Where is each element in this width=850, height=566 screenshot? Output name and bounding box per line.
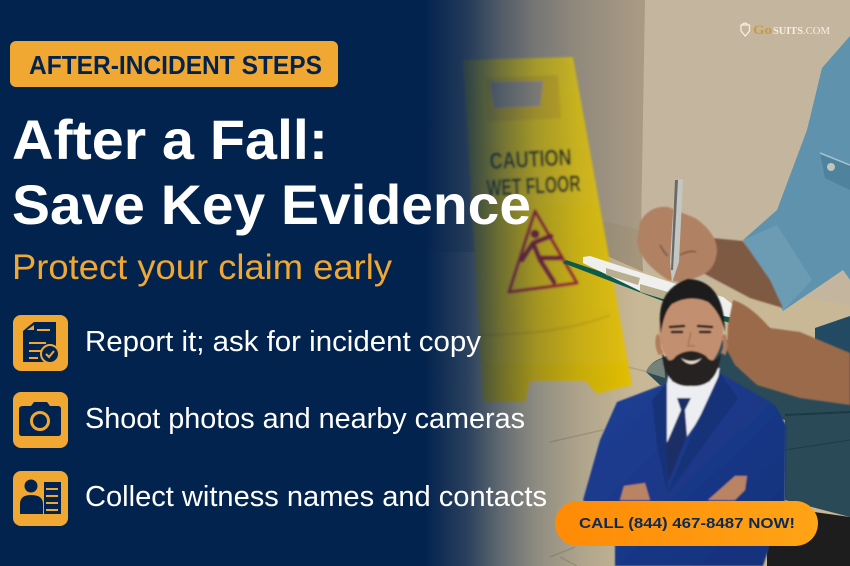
logo: SUITS	[773, 26, 803, 37]
step 1: report	[13, 315, 481, 371]
attorney: crossed arm hands	[620, 476, 747, 500]
logo: Go	[753, 23, 772, 37]
photo: writing hand and forearm	[637, 207, 783, 308]
attorney: patterned tie	[666, 398, 691, 482]
attorney: white shirt collar	[667, 368, 720, 465]
step 3: witnesses	[13, 471, 547, 526]
title	[12, 108, 531, 236]
photo: man's jeans and dark shoe	[646, 316, 850, 566]
attorney: face	[659, 288, 723, 372]
photo: yellow caution wet floor sign	[463, 57, 632, 402]
photo: holding hand and forearm	[727, 300, 850, 405]
photo: yellow caution wet floor sign: WET FLOOR	[486, 170, 581, 201]
attorney: neck	[672, 368, 710, 382]
step 1 text: Report it; ask for incident copy	[85, 326, 481, 358]
attorney: beard	[662, 351, 721, 386]
attorney: nose	[688, 332, 695, 346]
attorney: eyes and brows	[670, 326, 712, 327]
icon: witness contact card	[13, 471, 68, 526]
attorney: smile	[681, 358, 702, 364]
photo: clipboard with papers	[563, 256, 771, 334]
step 2 text: Shoot photos and nearby cameras	[85, 403, 525, 435]
attorney: hair	[660, 279, 725, 333]
icon: report document with check	[13, 315, 68, 371]
step 2: photos	[13, 392, 525, 448]
logo: .COM	[803, 26, 831, 37]
title: Save Key Evidence	[12, 173, 531, 236]
title: After a Fall:	[12, 108, 328, 171]
photo: denim shirt and sleeve	[743, 36, 850, 311]
photo: yellow caution wet floor sign: CAUTION	[489, 144, 572, 174]
call to action button	[555, 501, 818, 546]
subtitle: Protect your claim early	[12, 248, 393, 287]
attorney: lapels	[652, 373, 738, 493]
attorney: navy blue suit	[583, 373, 786, 566]
call to action button: CALL (844) 467-8487 NOW!	[579, 515, 795, 532]
icon: camera	[13, 392, 68, 448]
step 3 text: Collect witness names and contacts	[85, 481, 547, 513]
photo: silver pen	[670, 179, 683, 283]
attorney portrait	[583, 279, 786, 566]
badge: after-incident steps	[10, 41, 338, 87]
attorney: ears	[658, 335, 726, 354]
badge: after-incident steps: AFTER-INCIDENT STEPS	[29, 50, 322, 80]
logo	[741, 23, 831, 37]
